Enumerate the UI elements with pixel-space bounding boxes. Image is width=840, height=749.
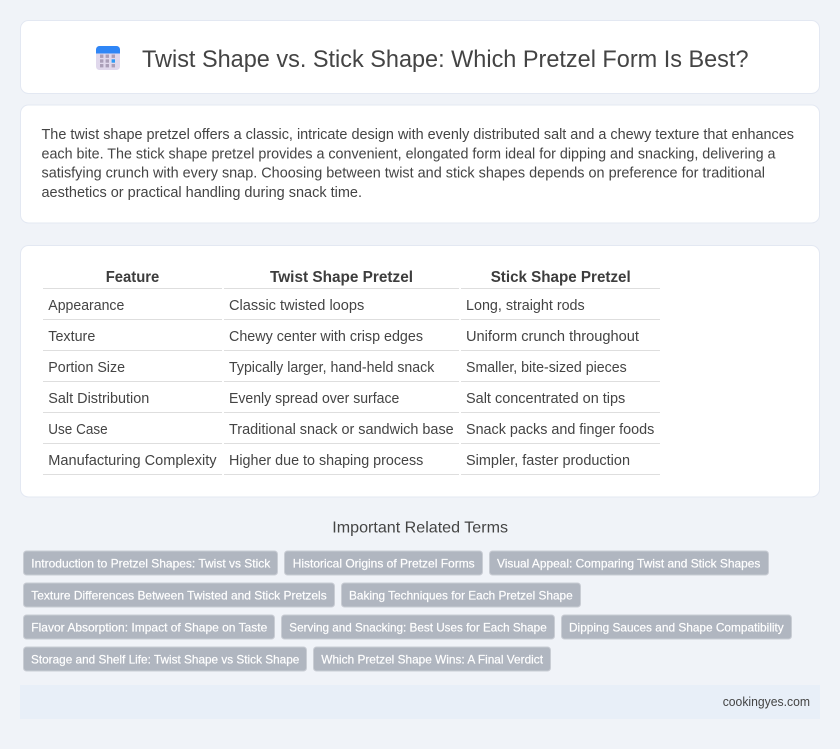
table row: appearance: Appearance — [48, 298, 124, 314]
table header row: Twist Shape Pretzel — [270, 269, 413, 286]
table row: portion size: Portion Size — [48, 360, 125, 376]
tag — [24, 551, 278, 575]
table row: salt distribution — [48, 391, 625, 407]
title: Twist Shape vs. Stick Shape: Which Pretzel Form Is Best? — [142, 46, 748, 73]
text block: introduction — [42, 127, 794, 201]
tag: Baking Techniques for Each Pretzel Shape — [349, 588, 573, 602]
table row: manufacturing complexity: Higher due to shaping process — [229, 453, 423, 469]
table row: manufacturing complexity: Simpler, faster production — [466, 453, 630, 469]
tag — [314, 647, 550, 671]
tag — [24, 647, 306, 671]
tag — [490, 551, 768, 575]
tag: Storage and Shelf Life: Twist Shape vs Stick Shape — [31, 652, 300, 666]
table row: portion size: Smaller, bite-sized pieces — [466, 360, 627, 376]
tag — [24, 583, 334, 607]
panel: title header — [20, 20, 820, 94]
tag — [562, 615, 792, 639]
table row: texture: Uniform crunch throughout — [466, 329, 639, 345]
table row: portion size — [48, 360, 627, 376]
table row: salt distribution: Evenly spread over surface — [229, 391, 399, 407]
table row: use case: Use Case — [48, 422, 108, 438]
footer bar — [20, 685, 820, 719]
table row: manufacturing complexity — [48, 453, 630, 469]
table row: appearance: Classic twisted loops — [229, 298, 364, 314]
table row: texture: Texture — [48, 329, 95, 345]
footer source text: cookingyes.com — [723, 694, 810, 709]
text block: introduction: The twist shape pretzel offers a classic, intricate design with evenly distributed salt and a chewy texture that enhances — [42, 127, 794, 143]
text block: introduction: each bite. The stick shape pretzel provides a convenient, elongated form ideal for dipping and snacking, delivering a — [42, 146, 776, 162]
tag: Historical Origins of Pretzel Forms — [293, 556, 475, 570]
tag: Visual Appeal: Comparing Twist and Stick Shapes — [497, 556, 760, 570]
tag: Which Pretzel Shape Wins: A Final Verdict — [321, 652, 544, 666]
table row: texture — [48, 329, 639, 345]
panel: comparison table — [20, 246, 820, 497]
text block: introduction: satisfying crunch with every snap. Choosing between twist and stick shapes depends on preference for traditional — [42, 166, 765, 182]
table row: use case — [48, 422, 654, 438]
tag: Flavor Absorption: Impact of Shape on Taste — [31, 620, 268, 634]
tag: Texture Differences Between Twisted and Stick Pretzels — [31, 588, 327, 602]
text block: introduction: aesthetics or practical handling during snack time. — [42, 185, 362, 201]
tag — [24, 615, 274, 639]
table row: use case: Traditional snack or sandwich base — [229, 422, 454, 438]
tag — [282, 615, 554, 639]
table header row: Stick Shape Pretzel — [491, 269, 631, 286]
icon: calendar — [96, 46, 120, 70]
tag: Introduction to Pretzel Shapes: Twist vs Stick — [31, 556, 271, 570]
table row: appearance — [48, 298, 585, 314]
table row: salt distribution: Salt concentrated on tips — [466, 391, 625, 407]
panel: introduction paragraph — [20, 105, 820, 223]
tag — [284, 551, 482, 575]
table row: portion size: Typically larger, hand-held snack — [229, 360, 435, 376]
table row: use case: Snack packs and finger foods — [466, 422, 654, 438]
heading: important related terms: Important Related Terms — [332, 520, 508, 537]
table row: manufacturing complexity: Manufacturing Complexity — [48, 453, 217, 469]
tag: Dipping Sauces and Shape Compatibility — [569, 620, 784, 634]
table header row: Feature — [106, 269, 159, 286]
table row: appearance: Long, straight rods — [466, 298, 585, 314]
table row: salt distribution: Salt Distribution — [48, 391, 149, 407]
tag: Serving and Snacking: Best Uses for Each Shape — [289, 620, 547, 634]
related term tags — [24, 551, 792, 671]
table header row — [106, 269, 631, 286]
tag — [342, 583, 580, 607]
table row: texture: Chewy center with crisp edges — [229, 329, 423, 345]
